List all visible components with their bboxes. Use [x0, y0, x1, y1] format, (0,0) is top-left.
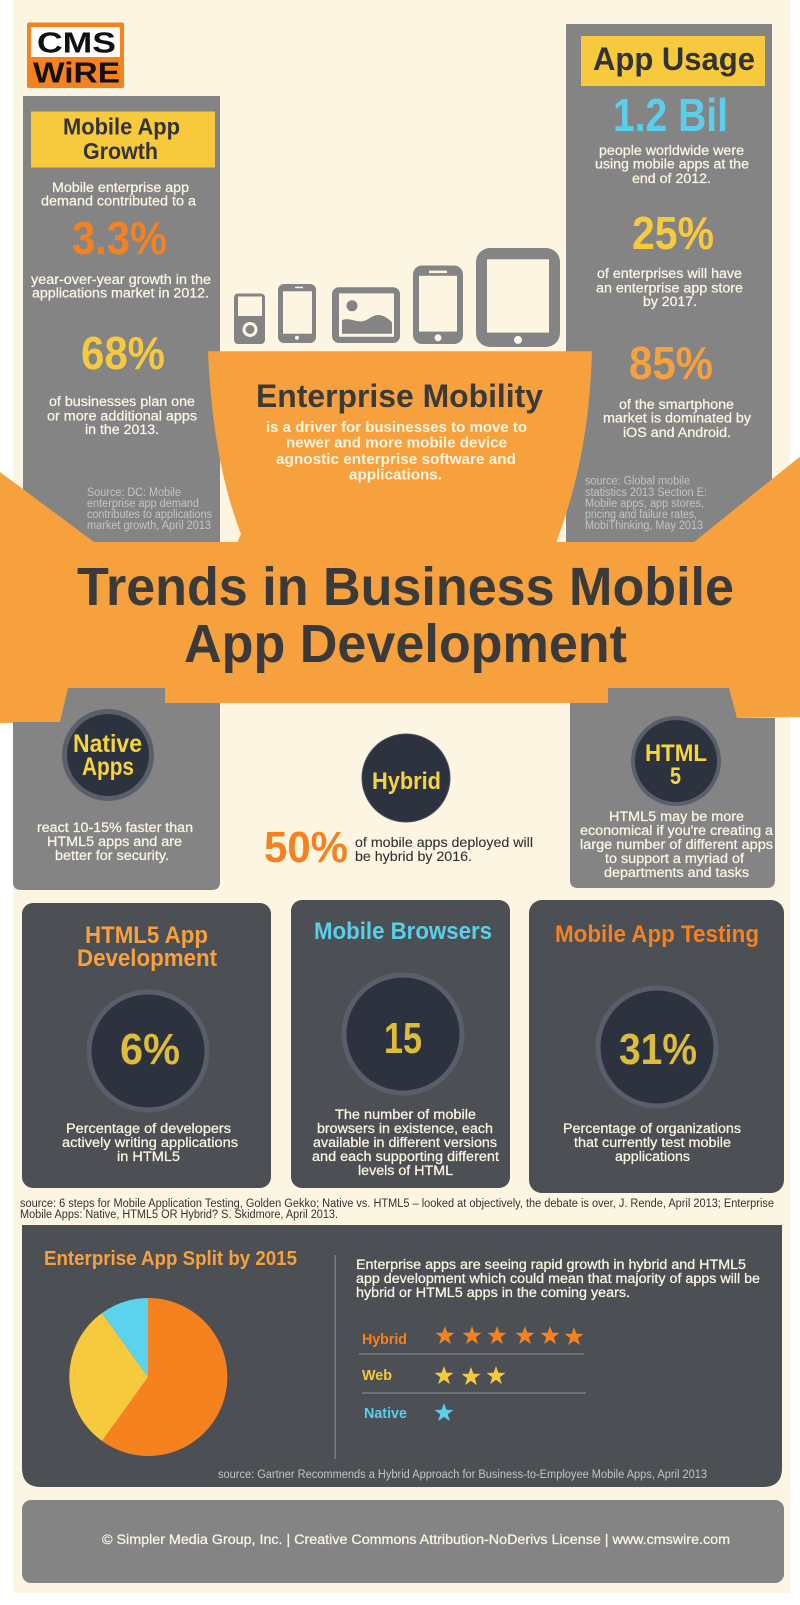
text: growth intro	[41, 180, 197, 209]
stat circle: 6%	[86, 990, 210, 1112]
text: browsers: and each supporting different	[312, 1149, 499, 1164]
text: html5 description: departments and tasks	[604, 865, 749, 880]
panel: enterprise app split	[22, 1225, 782, 1487]
text: smartphone market	[603, 397, 751, 440]
badge: html 5	[631, 716, 721, 806]
text: enterprise mobility description: agnostic enterprise software and	[276, 452, 516, 468]
heading: html5 app development: HTML5 App	[85, 922, 208, 949]
text: businesses plan: or more additional apps	[47, 408, 197, 424]
stat: 3.3%: 3.3%	[72, 212, 167, 264]
rating: native: Native	[364, 1405, 407, 1422]
badge: native apps	[62, 709, 154, 801]
text: people worldwide: people worldwide were	[599, 143, 744, 158]
panel: mobile browsers	[291, 900, 510, 1188]
source: cards	[20, 1198, 774, 1221]
source: growth: market growth, April 2013	[87, 520, 211, 532]
heading box: Mobile App Growth: Mobile App	[63, 113, 180, 139]
panel: native apps	[13, 688, 220, 890]
logo: CMS Wire: WiRE	[33, 58, 120, 90]
source: usage: MobiThinking, May 2013	[585, 520, 703, 532]
text: organizations: Percentage of organizations	[563, 1121, 741, 1136]
source: cards: source: 6 steps for Mobile Application Testing, Golden Gekko; Native vs. HTML5 – looked at objectively, the debate is over, J. Rende, April 2013; Enterprise	[20, 1198, 774, 1210]
text: enterprise mobility	[256, 378, 543, 483]
text: smartphone market: market is dominated by	[603, 410, 751, 426]
text: enterprise mobility: Enterprise Mobility	[256, 378, 543, 414]
text: browsers: The number of mobile	[335, 1107, 476, 1122]
panel: html5	[570, 688, 775, 888]
rating: web	[362, 1366, 586, 1394]
text: enterprises: of enterprises will have	[597, 266, 742, 281]
text: developers: actively writing applications	[62, 1135, 238, 1150]
heading: html5 app development	[77, 922, 217, 972]
text: native description: HTML5 apps and are	[47, 834, 182, 849]
icon: picture	[332, 287, 400, 343]
title	[77, 557, 734, 674]
source: gartner: source: Gartner Recommends a Hybrid Approach for Business-to-Employee Mobile Apps, April 2013	[218, 1469, 707, 1481]
footer	[22, 1500, 784, 1583]
icon: large phone	[413, 266, 463, 344]
icon: small phone	[278, 284, 316, 343]
rating: web: Web	[362, 1367, 392, 1384]
text: growth intro: Mobile enterprise app	[52, 180, 189, 195]
text: developers	[62, 1121, 238, 1164]
text: businesses plan: of businesses plan one	[49, 394, 195, 409]
icon: music player	[234, 294, 265, 344]
source: usage: pricing and failure rates,	[585, 509, 697, 521]
heading box: Mobile App Growth: Growth	[83, 138, 158, 164]
stat circle: 6%: 6%	[120, 1025, 180, 1074]
badge: hybrid: Hybrid	[372, 768, 441, 795]
text: enterprise mobility description: applications.	[349, 467, 442, 483]
rating: hybrid: Hybrid	[362, 1331, 407, 1348]
source: growth	[87, 487, 212, 532]
text: split description: hybrid or HTML5 apps in the coming years.	[356, 1285, 630, 1300]
text: developers: in HTML5	[117, 1149, 180, 1164]
text: enterprises: an enterprise app store	[596, 280, 743, 295]
heading: mobile app testing: Mobile App Testing	[555, 921, 759, 948]
panel: mobile app growth	[23, 96, 220, 542]
footer: © Simpler Media Group, Inc. | Creative Commons Attribution-NoDerivs License | www.cmswire.com	[102, 1532, 730, 1547]
heading: enterprise app split: Enterprise App Split by 2015	[44, 1248, 297, 1270]
text: enterprises	[596, 266, 743, 309]
badge: native apps: Apps	[82, 753, 134, 781]
rating: hybrid	[359, 1326, 584, 1355]
logo: CMS Wire: CMS	[37, 28, 116, 60]
text: native description: react 10-15% faster than	[37, 820, 193, 835]
badge: hybrid	[362, 734, 450, 822]
source: cards: Mobile Apps: Native, HTML5 OR Hybrid? S. Skidmore, April 2013.	[20, 1209, 338, 1221]
stat circle: 31%	[596, 986, 718, 1108]
banner: title band	[0, 457, 800, 723]
title: Trends in Business Mobile	[77, 557, 734, 617]
stat: 68%: 68%	[81, 327, 165, 379]
text: growth description: year-over-year growth in the	[31, 272, 211, 287]
text: native description: better for security.	[55, 848, 169, 863]
title: App Development	[184, 614, 627, 674]
text: developers: Percentage of developers	[66, 1121, 231, 1136]
heading box: Mobile App Growth	[31, 112, 215, 168]
panel: mobile app testing	[529, 900, 784, 1193]
stat: 1.2 Bil: 1.2 Bil	[613, 89, 728, 141]
badge: native apps: Native	[73, 730, 142, 758]
text: split description: Enterprise apps are seeing rapid growth in hybrid and HTML5	[356, 1257, 746, 1272]
text: businesses plan: in the 2013.	[85, 422, 159, 437]
text: smartphone market: of the smartphone	[619, 397, 734, 412]
panel: app usage	[566, 24, 772, 542]
text: people worldwide: using mobile apps at the	[595, 156, 749, 171]
text: organizations	[563, 1121, 741, 1164]
source: usage: Mobile apps, app stores,	[585, 498, 704, 510]
stat: 50%: 50%	[264, 823, 348, 872]
stat circle: 15: 15	[384, 1014, 422, 1063]
text: smartphone market: iOS and Android.	[623, 425, 731, 440]
icon: tablet	[476, 248, 560, 347]
text: browsers	[312, 1107, 499, 1178]
badge: html 5: HTML	[645, 740, 707, 767]
heading box: App Usage	[581, 36, 765, 86]
text: browsers: browsers in existence, each	[317, 1121, 493, 1136]
text: native description	[37, 820, 193, 863]
source: usage	[585, 476, 707, 532]
text: browsers: available in different versions	[313, 1135, 497, 1150]
pie chart	[69, 1298, 227, 1456]
text: enterprise mobility description	[266, 420, 527, 483]
stat: 85%: 85%	[629, 337, 713, 389]
text: split description: app development which could mean that majority of apps will be	[356, 1271, 760, 1286]
text: split description	[356, 1257, 760, 1300]
source: growth: enterprise app demand	[87, 498, 199, 510]
text: enterprise mobility description: is a driver for businesses to move to	[266, 420, 527, 436]
heading: html5 app development: Development	[77, 945, 217, 972]
text: people worldwide: end of 2012.	[632, 171, 711, 186]
text: browsers: levels of HTML	[358, 1163, 454, 1178]
rating: native	[364, 1403, 454, 1422]
logo: CMS Wire	[27, 22, 124, 90]
text: html5 description: to support a myriad of	[605, 851, 744, 866]
text: hybrid description	[355, 835, 533, 864]
source: usage: statistics 2013 Section E:	[585, 487, 707, 499]
text: people worldwide	[595, 143, 749, 186]
text: enterprise mobility description: newer and more mobile device	[286, 435, 507, 451]
source: growth: Source: DC: Mobile	[87, 487, 181, 499]
text: organizations: applications	[615, 1149, 690, 1164]
text: hybrid description: of mobile apps deployed will	[355, 835, 533, 850]
text: growth description	[31, 272, 211, 300]
stat circle: 31%: 31%	[619, 1025, 697, 1074]
text: html5 description: HTML5 may be more	[609, 809, 744, 824]
heading: mobile browsers: Mobile Browsers	[314, 918, 492, 945]
text: enterprises: by 2017.	[643, 294, 697, 309]
heading box: App Usage: App Usage	[593, 41, 755, 77]
text: businesses plan	[47, 394, 197, 437]
badge: html 5: 5	[670, 763, 681, 790]
source: growth: contributes to applications	[87, 509, 212, 521]
panel: html5 app development	[22, 903, 271, 1188]
text: html5 description	[580, 809, 774, 880]
text: organizations: that currently test mobile	[574, 1135, 731, 1150]
source: usage: source: Global mobile	[585, 476, 690, 488]
stat circle: 15	[342, 972, 464, 1096]
text: html5 description: large number of different apps	[580, 837, 773, 852]
panel: enterprise mobility bowl	[208, 351, 592, 545]
stat: 25%: 25%	[632, 207, 714, 259]
text: hybrid description: be hybrid by 2016.	[355, 849, 472, 864]
text: growth description: applications market in 2012.	[32, 286, 209, 300]
text: growth intro: demand contributed to a	[41, 194, 197, 209]
text: html5 description: economical if you're creating a	[580, 823, 774, 838]
